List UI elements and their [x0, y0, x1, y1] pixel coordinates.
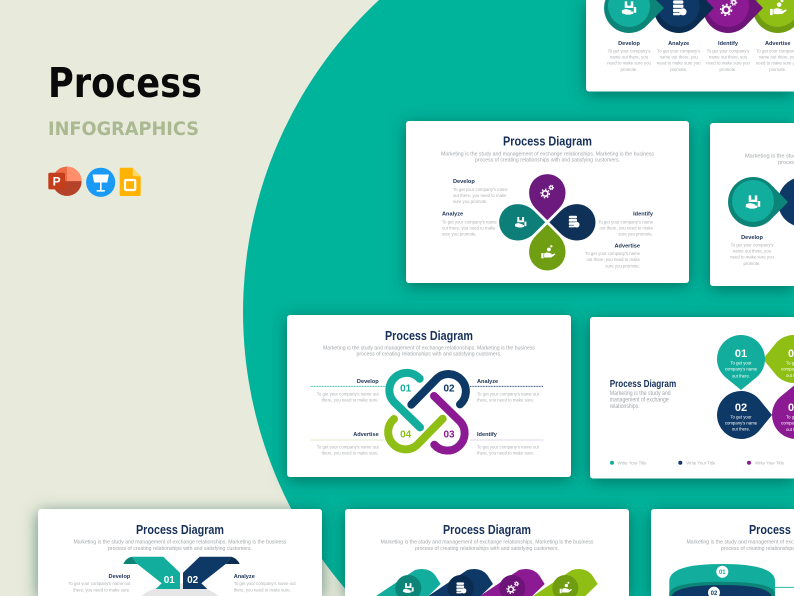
arrow: teal 01 [123, 557, 180, 589]
slide subtitle: process of creating relationships with and satisfying customers. [356, 352, 502, 358]
teardrop: teal 01 [717, 335, 765, 390]
icon: PowerPoint [48, 167, 82, 196]
label: Develop: promote. [744, 261, 760, 266]
arrow: navy 02 [183, 557, 240, 589]
legend [610, 460, 785, 465]
slide title: Process Diagram [610, 378, 676, 390]
label: Develop: To get your company's [731, 242, 773, 248]
label: Advertise [317, 432, 380, 455]
label: Analyze: name out there, you [660, 54, 698, 60]
label: Advertise: Advertise [353, 432, 379, 438]
label: Develop: Develop [618, 41, 640, 47]
label: Identify: promote. [720, 67, 736, 72]
arrow: navy 02: 02 [187, 575, 199, 586]
teardrop: teal 01: To get your [730, 361, 752, 366]
icon: Google Slides [120, 168, 141, 196]
chain of four drops [604, 0, 794, 33]
label: Analyze: Analyze [477, 379, 498, 385]
panel: right drop chain slide [710, 123, 794, 286]
label: Identify: To get your company's [707, 48, 749, 54]
teardrop: navy 02: out there. [732, 427, 750, 432]
label: Advertise: Advertise [614, 244, 640, 250]
label: Develop: promote. [621, 67, 637, 72]
teardrop: navy 02 [717, 391, 772, 439]
slide title: Process Diagram [136, 523, 224, 537]
label: Identify [477, 432, 540, 455]
label: Develop: name out there, you [610, 54, 649, 60]
label: Analyze [234, 574, 296, 592]
label: Develop: To get your company's name out [317, 392, 380, 397]
label: Advertise: To get your company's name [585, 251, 641, 256]
guide line [775, 586, 794, 588]
knot diagram [388, 373, 466, 451]
teardrop: teal 01: 01 [735, 348, 747, 360]
label: Analyze: To get your company's [657, 48, 700, 54]
label: Identify: out there, you need to make [599, 226, 654, 230]
label: Develop [730, 235, 774, 266]
label: Identify: Identify [718, 41, 739, 47]
label: Identify: sure you promote. [618, 232, 653, 236]
slide subtitle: process of creating relationships with and satisfying customers. [415, 546, 559, 552]
label: Develop: there, you need to make sure. [73, 587, 130, 592]
label: Develop: To get your company's name [453, 187, 508, 192]
label: Develop: out there, you need to make [453, 193, 507, 198]
subheading: Infographics: INFOGRAPHICS [48, 119, 199, 140]
band: teal [376, 569, 441, 596]
label: Develop [453, 179, 508, 204]
label: Analyze: To get your company's name [442, 220, 497, 224]
slide subtitle: process of creating relationships with and satisfying customers. [108, 546, 252, 552]
label: Advertise: Advertise [765, 41, 790, 47]
label: Develop: Develop [741, 235, 763, 241]
label: Identify: Identify [633, 212, 654, 218]
teardrop: purple 04 [772, 384, 794, 439]
icon: PowerPoint: P [53, 174, 61, 188]
panel: bottom middle band slide [345, 509, 629, 596]
label: Advertise [756, 41, 794, 72]
label: Develop: Develop [357, 379, 379, 385]
panel: knot slide [287, 315, 571, 477]
band: green [533, 569, 598, 596]
label: Advertise: promote. [769, 67, 786, 72]
slide subtitle [686, 539, 794, 552]
label: Analyze: Analyze [234, 574, 255, 580]
label: Develop [317, 379, 380, 403]
label: Identify: Identify [477, 432, 498, 438]
arrow: teal 01: 01 [164, 575, 175, 586]
label: Develop: Develop [109, 574, 131, 580]
label: Develop: sure you promote. [453, 199, 488, 204]
label: Identify [598, 212, 654, 236]
label: Develop: To get your company's name out [68, 581, 131, 586]
grey half circle [141, 583, 219, 596]
teardrop: navy 02: 02 [735, 402, 747, 414]
label: Identify: To get your company's name [598, 220, 654, 224]
label: Advertise: To get your company's name out [317, 444, 380, 449]
label: Analyze: out there, you need to make [442, 226, 496, 230]
number 03: 03 [443, 430, 455, 441]
label: Advertise [585, 244, 641, 268]
panel: bottom right cylinder slide [651, 509, 794, 596]
slide subtitle: process of creating relationships with and satisfying customers. [475, 158, 620, 164]
legend: Write Your Title [755, 460, 785, 465]
label: Analyze: need to make sure you [657, 60, 701, 66]
icon: Keynote [86, 168, 115, 197]
drop chain [728, 177, 794, 227]
label: Analyze [477, 379, 540, 403]
label: Identify: To get your company's name out [477, 444, 540, 449]
slide subtitle [380, 539, 594, 552]
slide subtitle [745, 154, 794, 166]
teardrop: teal 01: company's name [725, 367, 758, 372]
label: Develop [607, 41, 651, 72]
guide lines [311, 386, 544, 440]
number 01: 01 [400, 384, 412, 395]
label: Develop: Develop [453, 179, 475, 185]
label: Advertise: there, you need to make sure. [322, 450, 379, 455]
label: Analyze: Analyze [442, 212, 463, 218]
panel: bottom left arrows slide [38, 509, 322, 596]
teardrop: navy 02: To get your [730, 414, 752, 419]
label: Develop: To get your company's [608, 48, 650, 54]
label: Advertise: sure you promote. [605, 264, 640, 268]
label: Analyze: sure you promote. [442, 232, 477, 236]
slide description: Marketing is the study and [610, 391, 671, 397]
slide subtitle: Marketing is the study and management of exchange relationships. Marketing is the business [380, 539, 594, 545]
legend: Write Your Title [686, 460, 716, 465]
panel: four petal slide [406, 121, 689, 283]
label: Identify: name out there, you [709, 54, 748, 60]
cylinder diagram [669, 564, 775, 596]
slide subtitle: Marketing is the study and management of exchange relationships. Marketing is the business [441, 151, 654, 157]
label: Develop: need to make sure you [607, 60, 651, 66]
label: Analyze [657, 41, 701, 72]
label: Identify: there, you need to make sure. [477, 450, 534, 455]
band: navy [428, 569, 493, 596]
teardrop: teal 01: out there. [732, 373, 750, 378]
label: Analyze: To get your company's name out [234, 581, 296, 586]
label: Analyze: To get your company's name out [477, 392, 540, 397]
label: Analyze: promote. [670, 67, 687, 72]
slide title: Process Diagram [503, 134, 592, 148]
slide subtitle: Marketing is the study and management of exchange relationships. Marketing is the business [323, 346, 535, 352]
label: Identify [706, 41, 750, 72]
label: Advertise: out there, you need to make [586, 257, 641, 262]
teardrop: navy 02: company's name [725, 421, 758, 426]
label: Analyze: there, you need to make sure. [477, 398, 534, 403]
panel: teardrop grid slide [590, 317, 794, 478]
label: Develop: need to make sure you [730, 254, 774, 260]
slide subtitle: Marketing is the study and management of exchange relationships. Marketing is the business [74, 539, 287, 545]
label: Analyze: there, you need to make sure. [234, 587, 291, 592]
slide subtitle [74, 539, 287, 552]
panel: top right slide [586, 0, 794, 91]
slide title: Process Diagram [443, 523, 531, 537]
slide description: management of exchange [610, 397, 669, 403]
teal background circle [243, 0, 794, 596]
slide title: Process Diagram [385, 329, 473, 343]
teardrop: green 03 [763, 335, 794, 383]
label: Develop [68, 574, 131, 592]
heading: Process: Process [48, 59, 202, 107]
number 04: 04 [400, 430, 412, 441]
band: purple [480, 569, 545, 596]
slide description [610, 391, 671, 410]
label: Develop: name out there, you [733, 248, 772, 254]
petal diagram [499, 174, 596, 270]
number 02: 02 [443, 384, 455, 395]
cylinder diagram: 01 [719, 570, 726, 576]
label: Develop: there, you need to make sure. [322, 398, 379, 403]
label: Analyze: Analyze [668, 41, 689, 47]
legend: Write Your Title [618, 460, 647, 465]
slide subtitle [441, 151, 654, 164]
label: Analyze [442, 212, 497, 236]
slide description: relationships. [610, 404, 640, 410]
slide subtitle [323, 346, 535, 358]
label: Identify: need to make sure you [706, 60, 750, 66]
